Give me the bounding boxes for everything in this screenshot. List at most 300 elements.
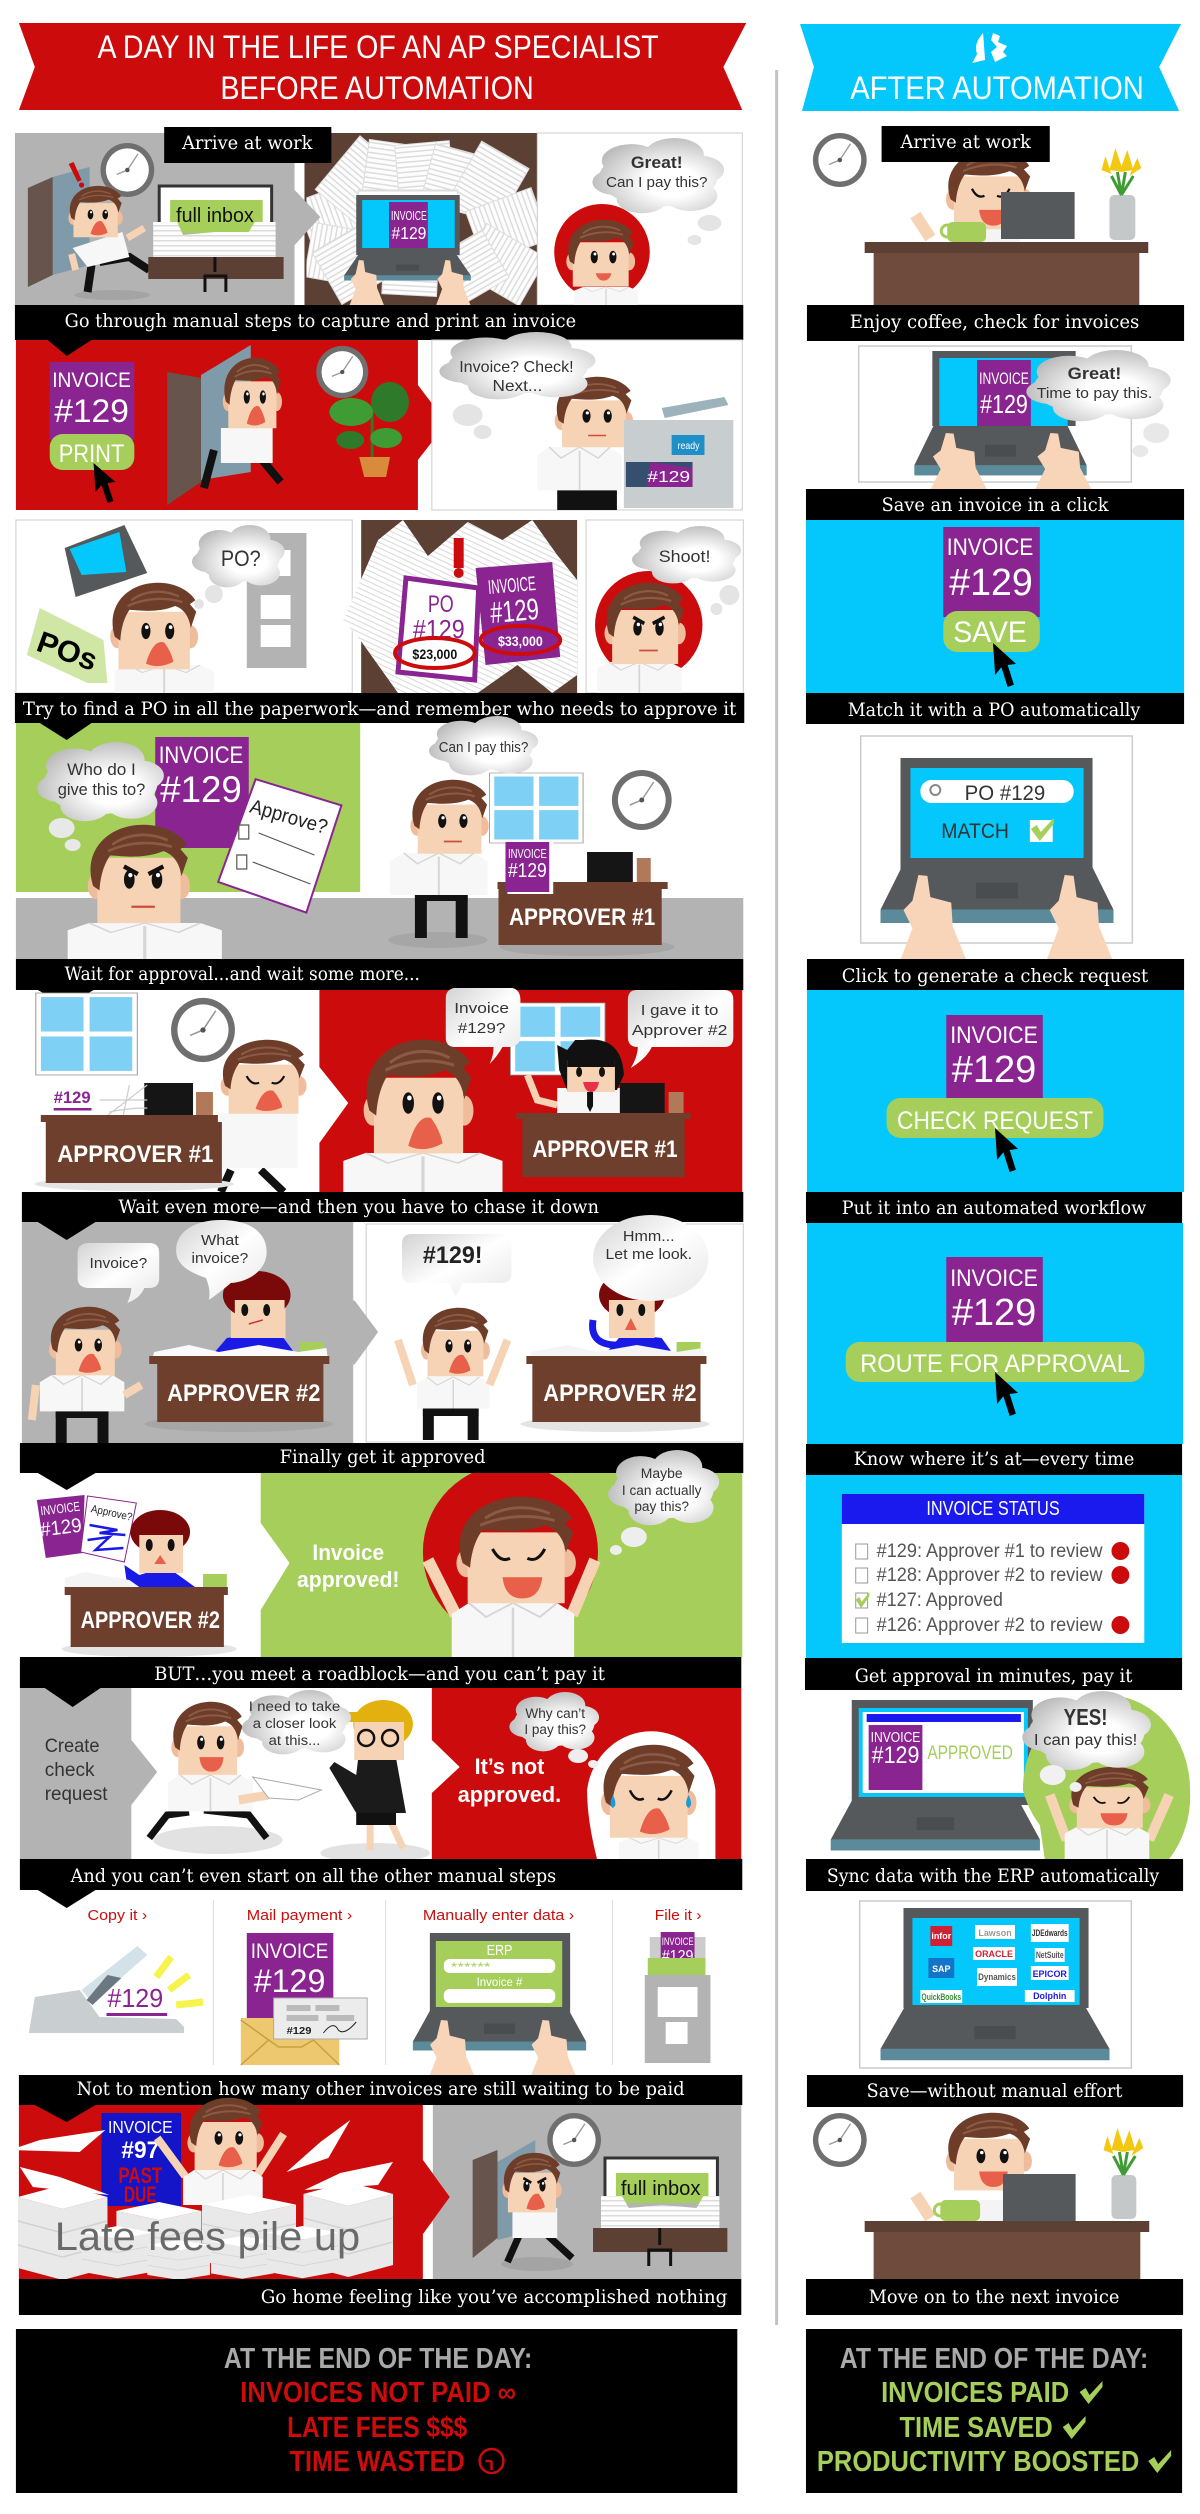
invoice and approve papers: [37, 1495, 136, 1562]
step: mail payment: [241, 1907, 367, 2065]
thought cloud: pay this?: [634, 1498, 689, 1514]
after: check request panel: #129: [952, 1049, 1036, 1091]
after: PO match laptop: [861, 736, 1132, 960]
speech bubble: invoice: [78, 1243, 159, 1303]
speech bubble: gave it to approver 2: [628, 990, 733, 1068]
icon: laptop tilted: [65, 525, 147, 597]
panel: end of the day, before: [16, 2329, 737, 2493]
speech bubble: 129: [402, 1234, 511, 1297]
panel: end of the day, after: INVOICES PAID: [881, 2377, 1069, 2409]
it's not approved text: approved.: [458, 1782, 561, 1807]
caption: chase: [22, 1192, 743, 1222]
laptop: #129: [392, 223, 426, 243]
thought cloud: Next...: [493, 378, 542, 395]
after: route for approval panel: ROUTE FOR APPROVAL: [860, 1350, 1130, 1378]
icon: logo speech gear: [972, 33, 1007, 63]
caption: roadblock: BUT…you meet a roadblock—and you can’t pay it: [154, 1663, 605, 1685]
caption: go home: Go home feeling like you’ve accomplished nothing: [261, 2286, 727, 2308]
panel: laptop in paperwork: [295, 133, 550, 306]
status card: #128: Approver #2 to review: [877, 1565, 1103, 1586]
vase with flowers: [1103, 2128, 1143, 2219]
past due invoice: INVOICE: [108, 2117, 173, 2137]
panel: invoice approved: [261, 1450, 742, 1658]
approve document: [216, 776, 343, 915]
paper sheets: [296, 136, 550, 306]
icon: clock: [547, 2113, 601, 2167]
erp logos: infor: [931, 1931, 952, 1941]
caption: finally approved: [20, 1443, 743, 1473]
man: [537, 377, 633, 510]
thought cloud: give this to?: [58, 780, 145, 799]
caption: wait: Wait for approval...and wait some more...: [65, 963, 420, 985]
erp logos: [920, 1924, 1075, 2003]
after: check request panel: [807, 990, 1184, 1192]
step: mail payment: #129: [287, 2026, 312, 2037]
icon: clock: [813, 133, 867, 187]
thought cloud: I pay this?: [524, 1721, 586, 1737]
caption: know where: Know where it’s at—every time: [854, 1448, 1134, 1470]
plant: [329, 382, 409, 477]
thought cloud: [439, 332, 595, 439]
after: route for approval panel: INVOICE: [950, 1265, 1038, 1292]
thought cloud: Great!: [631, 153, 683, 172]
blonde woman: [320, 1700, 430, 1863]
panel: find the PO, filing cabinet: [16, 520, 352, 694]
thought cloud: Time to pay this.: [1037, 385, 1152, 402]
desk: APPROVER #1: [532, 1136, 678, 1163]
text: create check request: check: [45, 1760, 95, 1781]
erp logos: EPICOR: [1033, 1969, 1067, 1979]
after: save button panel: [806, 520, 1184, 693]
status card: INVOICE STATUS: [926, 1498, 1060, 1520]
text: create check request: request: [45, 1784, 108, 1805]
icon: exclamation: [69, 162, 84, 188]
caption: save in a click: Save an invoice in a click: [882, 494, 1109, 516]
panel: shoot: [586, 520, 743, 694]
paper piles: [18, 2182, 393, 2280]
step: copy it: #129: [107, 1985, 163, 2013]
laptop: INVOICE: [391, 208, 427, 223]
man: [915, 150, 1032, 242]
step: manually enter data: Invoice #: [477, 1975, 523, 1989]
thought cloud: [1022, 1691, 1151, 1792]
caption: manual steps: [15, 305, 743, 340]
approve document: Approve?: [247, 796, 330, 839]
icon: exclamation: [454, 538, 464, 578]
text: create check request: [45, 1736, 108, 1805]
speech bubble: gave it to approver 2: I gave it to: [641, 1002, 718, 1019]
speech bubble: hmm: [593, 1215, 708, 1301]
copier: #129: [647, 469, 690, 486]
panel: 129 hmm let me look: [354, 1215, 743, 1442]
icon: clock: [100, 143, 154, 197]
thought cloud: YES!: [1064, 1704, 1107, 1730]
caption: check request: Click to generate a check request: [842, 965, 1149, 987]
panel: end of the day, before: LATE FEES $$$: [287, 2412, 467, 2444]
step: file it: File it ›: [655, 1907, 701, 1924]
invoice document: INVOICE: [487, 573, 537, 599]
thought cloud: [608, 1450, 719, 1555]
step: manually enter data: ERP: [487, 1942, 512, 1959]
PO document: $23,000: [412, 646, 457, 662]
invoice and approve papers: INVOICE: [39, 1499, 81, 1518]
after: save invoice laptop: #129: [980, 391, 1028, 419]
speech bubble: what invoice: invoice?: [192, 1250, 248, 1267]
icon: window: [490, 773, 583, 843]
speech bubble: invoice: Invoice?: [90, 1255, 147, 1272]
panel: chase it down: [319, 988, 742, 1192]
desk: approver 1: [498, 852, 675, 956]
thought cloud: Can I pay this?: [606, 174, 707, 191]
thought cloud: [592, 138, 724, 245]
pointer: [45, 1688, 100, 1707]
thought cloud: [192, 525, 285, 609]
man: [110, 583, 214, 694]
speech bubble: hmm: Let me look.: [605, 1246, 692, 1263]
past due invoice: [101, 2113, 181, 2207]
desk: [516, 1083, 691, 1177]
small invoice: INVOICE: [508, 846, 547, 861]
invoice card: INVOICE: [52, 369, 131, 392]
after: invoice status panel: [806, 1475, 1182, 1658]
speech bubble: invoice 129: [446, 988, 520, 1064]
full inbox: [593, 2158, 727, 2266]
thought cloud: [242, 1690, 351, 1754]
icon: clock: [612, 770, 672, 830]
pointer: [48, 340, 92, 356]
caption: other invoices: Not to mention how many other invoices are still waiting to be paid: [77, 2078, 685, 2100]
banner: after automation: [800, 24, 1181, 111]
icon: window: [36, 993, 137, 1075]
pointer: [38, 990, 94, 1006]
woman: [124, 1510, 195, 1587]
step: mail payment: #129: [254, 1963, 325, 1999]
man: [220, 1040, 307, 1192]
banner: before automation: BEFORE AUTOMATION: [220, 70, 534, 106]
desk: [520, 1345, 709, 1432]
erp logos: Lawson: [978, 1928, 1012, 1938]
invoice card: #129: [54, 393, 129, 429]
step: copy it: Copy it ›: [88, 1907, 147, 1924]
desk: APPROVER #2: [81, 1607, 220, 1634]
vertical divider: [775, 70, 778, 2325]
thought cloud: Maybe: [641, 1465, 683, 1481]
caption: roadblock: [20, 1657, 741, 1688]
small invoice: [505, 842, 553, 894]
past due invoice: PAST: [118, 2163, 163, 2188]
step: mail payment: INVOICE: [251, 1940, 328, 1963]
invoice approved text: approved!: [297, 1567, 400, 1592]
pointer: [40, 723, 92, 740]
after: check request panel: CHECK REQUEST: [897, 1107, 1093, 1135]
banner: before automation: [19, 23, 746, 110]
panel: late fees: [10, 2098, 450, 2280]
icon: clock: [813, 2113, 867, 2167]
invoice approved text: [297, 1540, 400, 1592]
after: route for approval panel: [807, 1223, 1183, 1444]
PO document: #129: [413, 616, 465, 644]
status card: #127: Approved: [877, 1590, 1003, 1611]
thought cloud: I need to take: [249, 1698, 341, 1714]
after: save invoice laptop: [859, 346, 1171, 490]
thought cloud: [37, 742, 164, 851]
desk: [62, 1572, 237, 1657]
erp logos: QuickBooks: [921, 1992, 961, 2002]
panel: approver 2 signs: [37, 1473, 237, 1657]
thought cloud: Invoice? Check!: [459, 359, 574, 376]
speech bubble: what invoice: [176, 1220, 267, 1300]
icon: door: [498, 2140, 535, 2240]
man hands up: [398, 1308, 507, 1440]
icon: clock: [316, 346, 368, 398]
panel: create check request: [20, 1688, 157, 1859]
label: arrive at work: Arrive at work: [181, 132, 313, 154]
panel: end of the day, before: TIME WASTED: [290, 2446, 465, 2478]
after: approved laptop: [831, 1691, 1190, 1859]
thought cloud: Can I pay this?: [439, 739, 528, 756]
panel: other manual steps: [29, 1890, 710, 2080]
panel: waiting desk: [35, 990, 307, 1192]
pointer: [38, 1222, 96, 1240]
invoice and approve papers: #129: [39, 1515, 83, 1542]
caption: match PO: [806, 693, 1184, 724]
caption: save without effort: Save—without manual effort: [867, 2080, 1123, 2102]
icon: window: [510, 1003, 605, 1075]
full inbox: [148, 186, 284, 292]
small invoice: #129: [508, 860, 547, 882]
erp logos: ORACLE: [975, 1949, 1013, 1959]
thought cloud: Who do I: [67, 760, 136, 779]
panel: print invoice: [16, 340, 447, 510]
running man: [149, 1702, 283, 1854]
caption: finally approved: Finally get it approved: [280, 1446, 486, 1468]
erp logos: Dynamics: [978, 1972, 1016, 1982]
desk: [865, 242, 1148, 305]
text: create check request: Create: [45, 1736, 100, 1757]
panel: end of the day, after: TIME SAVED: [900, 2412, 1053, 2444]
step: mail payment: Mail payment ›: [247, 1907, 352, 1924]
PO document: PO: [428, 591, 454, 618]
desk: [35, 1083, 234, 1191]
caption: find a PO: Try to find a PO in all the paperwork—and remember who needs to approve it: [23, 698, 737, 720]
desk: approver 1: APPROVER #1: [509, 904, 655, 931]
panel: end of the day, after: AT THE END OF THE DAY:: [840, 2343, 1148, 2375]
step: copy it: [29, 1907, 203, 2033]
label: arrive at work: Arrive at work: [900, 131, 1031, 153]
man crying: [587, 1731, 715, 1859]
status card: #126: Approver #2 to review: [877, 1615, 1103, 1636]
pointer: [35, 2105, 96, 2122]
speech bubble: hmm: Hmm...: [623, 1228, 675, 1245]
man celebrating: [1023, 1695, 1190, 1859]
thought cloud: Why can’t: [525, 1705, 585, 1721]
erp logos: Dolphin: [1033, 1991, 1066, 2001]
icon: clock: [171, 998, 235, 1062]
caption: sync data: [806, 1859, 1183, 1891]
icon: folder POs: [27, 608, 107, 683]
step: file it: [645, 1907, 710, 2063]
invoice document: #129: [489, 593, 540, 630]
past due invoice: DUE: [124, 2182, 157, 2207]
invoice card: INVOICE: [159, 742, 243, 769]
man: [68, 825, 222, 959]
copier: [624, 397, 733, 508]
flying papers: [10, 2120, 393, 2195]
banner: after automation: AFTER AUTOMATION: [850, 70, 1144, 106]
panel: end of the day, before: AT THE END OF THE DAY:: [224, 2343, 532, 2375]
thought cloud: PO?: [221, 546, 261, 571]
caption: manual steps: Go through manual steps to capture and print an invoice: [65, 310, 576, 332]
laptop: [344, 195, 471, 306]
desk: APPROVER #2: [167, 1380, 320, 1407]
pointer: [38, 1890, 96, 1908]
step: manually enter data: Manually enter data ›: [423, 1907, 574, 1924]
caption: other invoices: [19, 2075, 742, 2105]
after: save button panel: #129: [949, 562, 1033, 604]
approver man: [527, 1039, 624, 1114]
man: [32, 1307, 141, 1447]
desk: [865, 2221, 1149, 2279]
caption: match PO: Match it with a PO automatically: [848, 699, 1141, 721]
woman: [214, 1271, 323, 1355]
thought cloud: I can pay this!: [1034, 1732, 1137, 1749]
caption: go home: [19, 2279, 741, 2315]
it's not approved text: [458, 1754, 561, 1807]
after: route for approval panel: #129: [952, 1292, 1036, 1334]
speech bubble: invoice 129: Invoice: [454, 1000, 509, 1017]
man running: [68, 186, 150, 300]
caption: get approval: [805, 1658, 1182, 1690]
erp logos: SAP: [932, 1964, 951, 1974]
full inbox: full inbox: [621, 2178, 701, 2200]
thought cloud: Shoot!: [659, 547, 710, 566]
erp logos: NetSuite: [1036, 1950, 1064, 1960]
panel: end of the day, before: INVOICES NOT PAID ∞: [240, 2377, 516, 2409]
caption: automated workflow: Put it into an automated workflow: [842, 1197, 1146, 1219]
after: ERP logos laptop: [860, 1901, 1131, 2068]
caption: enjoy coffee: Enjoy coffee, check for invoices: [850, 311, 1139, 333]
vase with flowers: [1101, 148, 1141, 240]
after: PO match laptop: PO #129: [965, 782, 1045, 805]
invoice and approve papers: Approve?: [90, 1503, 133, 1524]
caption: next invoice: Move on to the next invoice: [869, 2286, 1119, 2308]
icon: filing cabinet: [247, 533, 306, 668]
late fees text: Late fees pile up: [55, 2215, 360, 2259]
laptop back: [1003, 2174, 1076, 2221]
copier: ready: [678, 441, 700, 452]
panel: PO mismatch: [343, 520, 577, 693]
thought cloud: at this...: [269, 1732, 320, 1748]
banner: before automation: A DAY IN THE LIFE OF AN AP SPECIALIST: [98, 29, 659, 65]
panel: check next copier: [432, 332, 742, 510]
step: file it: INVOICE: [662, 1936, 694, 1948]
panicking man: [157, 2098, 284, 2205]
after: save button panel: INVOICE: [947, 534, 1033, 561]
icon: clock: [480, 2449, 503, 2473]
thought cloud: Great!: [1068, 364, 1121, 383]
after: approved laptop: INVOICE: [871, 1729, 920, 1746]
PO document: [395, 578, 479, 680]
panel: arrive at work, inbox: [15, 133, 320, 305]
man leaving: [501, 2153, 573, 2271]
label: arrive at work: [164, 127, 331, 163]
panel: go home: [423, 2105, 741, 2279]
thought cloud: [632, 526, 741, 615]
desk: [144, 1345, 333, 1432]
check paper: [253, 1777, 321, 1800]
caption: next invoice: [806, 2279, 1183, 2315]
coffee cup: [941, 222, 986, 242]
thought cloud: [1026, 350, 1171, 457]
panel: closer look: [149, 1690, 430, 1863]
big man: [343, 1040, 502, 1192]
caption: other manual steps: [20, 1859, 742, 1890]
invoice card: [50, 362, 134, 503]
label: arrive at work: [882, 126, 1050, 162]
after: check request panel: INVOICE: [950, 1022, 1038, 1049]
step: manually enter data: [413, 1907, 586, 2080]
thought cloud: I can actually: [622, 1482, 702, 1498]
invoice card: [155, 737, 249, 848]
desk: APPROVER #1: [57, 1141, 213, 1168]
thought cloud: [509, 1692, 599, 1768]
panel: invoice what invoice: [22, 1220, 378, 1447]
laptop back: [1001, 192, 1075, 239]
invoice card: PRINT: [59, 440, 124, 468]
caption: get approval: Get approval in minutes, pay it: [855, 1665, 1133, 1687]
past due invoice: #97: [121, 2137, 159, 2164]
caption: automated workflow: [806, 1192, 1182, 1223]
caption: save without effort: [807, 2075, 1183, 2107]
invoice document: $33,000: [498, 633, 543, 649]
desk: APPROVER #2: [543, 1380, 697, 1407]
caption: know where: [806, 1444, 1182, 1475]
after: approved laptop: APPROVED: [927, 1743, 1013, 1764]
caption: chase: Wait even more—and then you have to chase it down: [118, 1196, 599, 1218]
caption: sync data: Sync data with the ERP automatically: [827, 1865, 1159, 1887]
caption: check request: [807, 959, 1184, 990]
thought cloud: [429, 716, 538, 775]
panel: not approved: [432, 1688, 741, 1859]
full inbox: full inbox: [176, 205, 254, 227]
after: save button panel: SAVE: [953, 616, 1027, 649]
invoice card: #129: [160, 769, 242, 810]
after: desk with coffee: [813, 133, 1148, 305]
after: save invoice laptop: INVOICE: [979, 369, 1029, 388]
door with man: [167, 345, 282, 505]
status card: #129: Approver #1 to review: [877, 1541, 1103, 1562]
standing man: [388, 780, 489, 948]
invoice document: [476, 562, 560, 665]
caption: save in a click: [806, 489, 1184, 520]
speech bubble: 129: #129!: [423, 1242, 483, 1269]
thought cloud: a closer look: [253, 1715, 336, 1731]
caption: wait: [16, 959, 743, 990]
erp logos: JDEdwards: [1032, 1928, 1068, 1938]
step: file it: #129: [662, 1948, 694, 1965]
panel: wait for approval: [16, 716, 743, 959]
woman: [593, 1271, 700, 1355]
speech bubble: what invoice: What: [201, 1232, 240, 1249]
after: PO match laptop: MATCH: [941, 820, 1009, 843]
it's not approved text: It’s not: [475, 1754, 545, 1779]
panel: end of the day, after: PRODUCTIVITY BOOSTED: [817, 2446, 1139, 2478]
invoice approved text: Invoice: [312, 1540, 384, 1565]
after: next invoice desk: [813, 2113, 1149, 2279]
after: approved laptop: #129: [872, 1742, 919, 1769]
panel: end of the day, after: [806, 2329, 1182, 2493]
panel: great can I pay this: [537, 133, 742, 305]
